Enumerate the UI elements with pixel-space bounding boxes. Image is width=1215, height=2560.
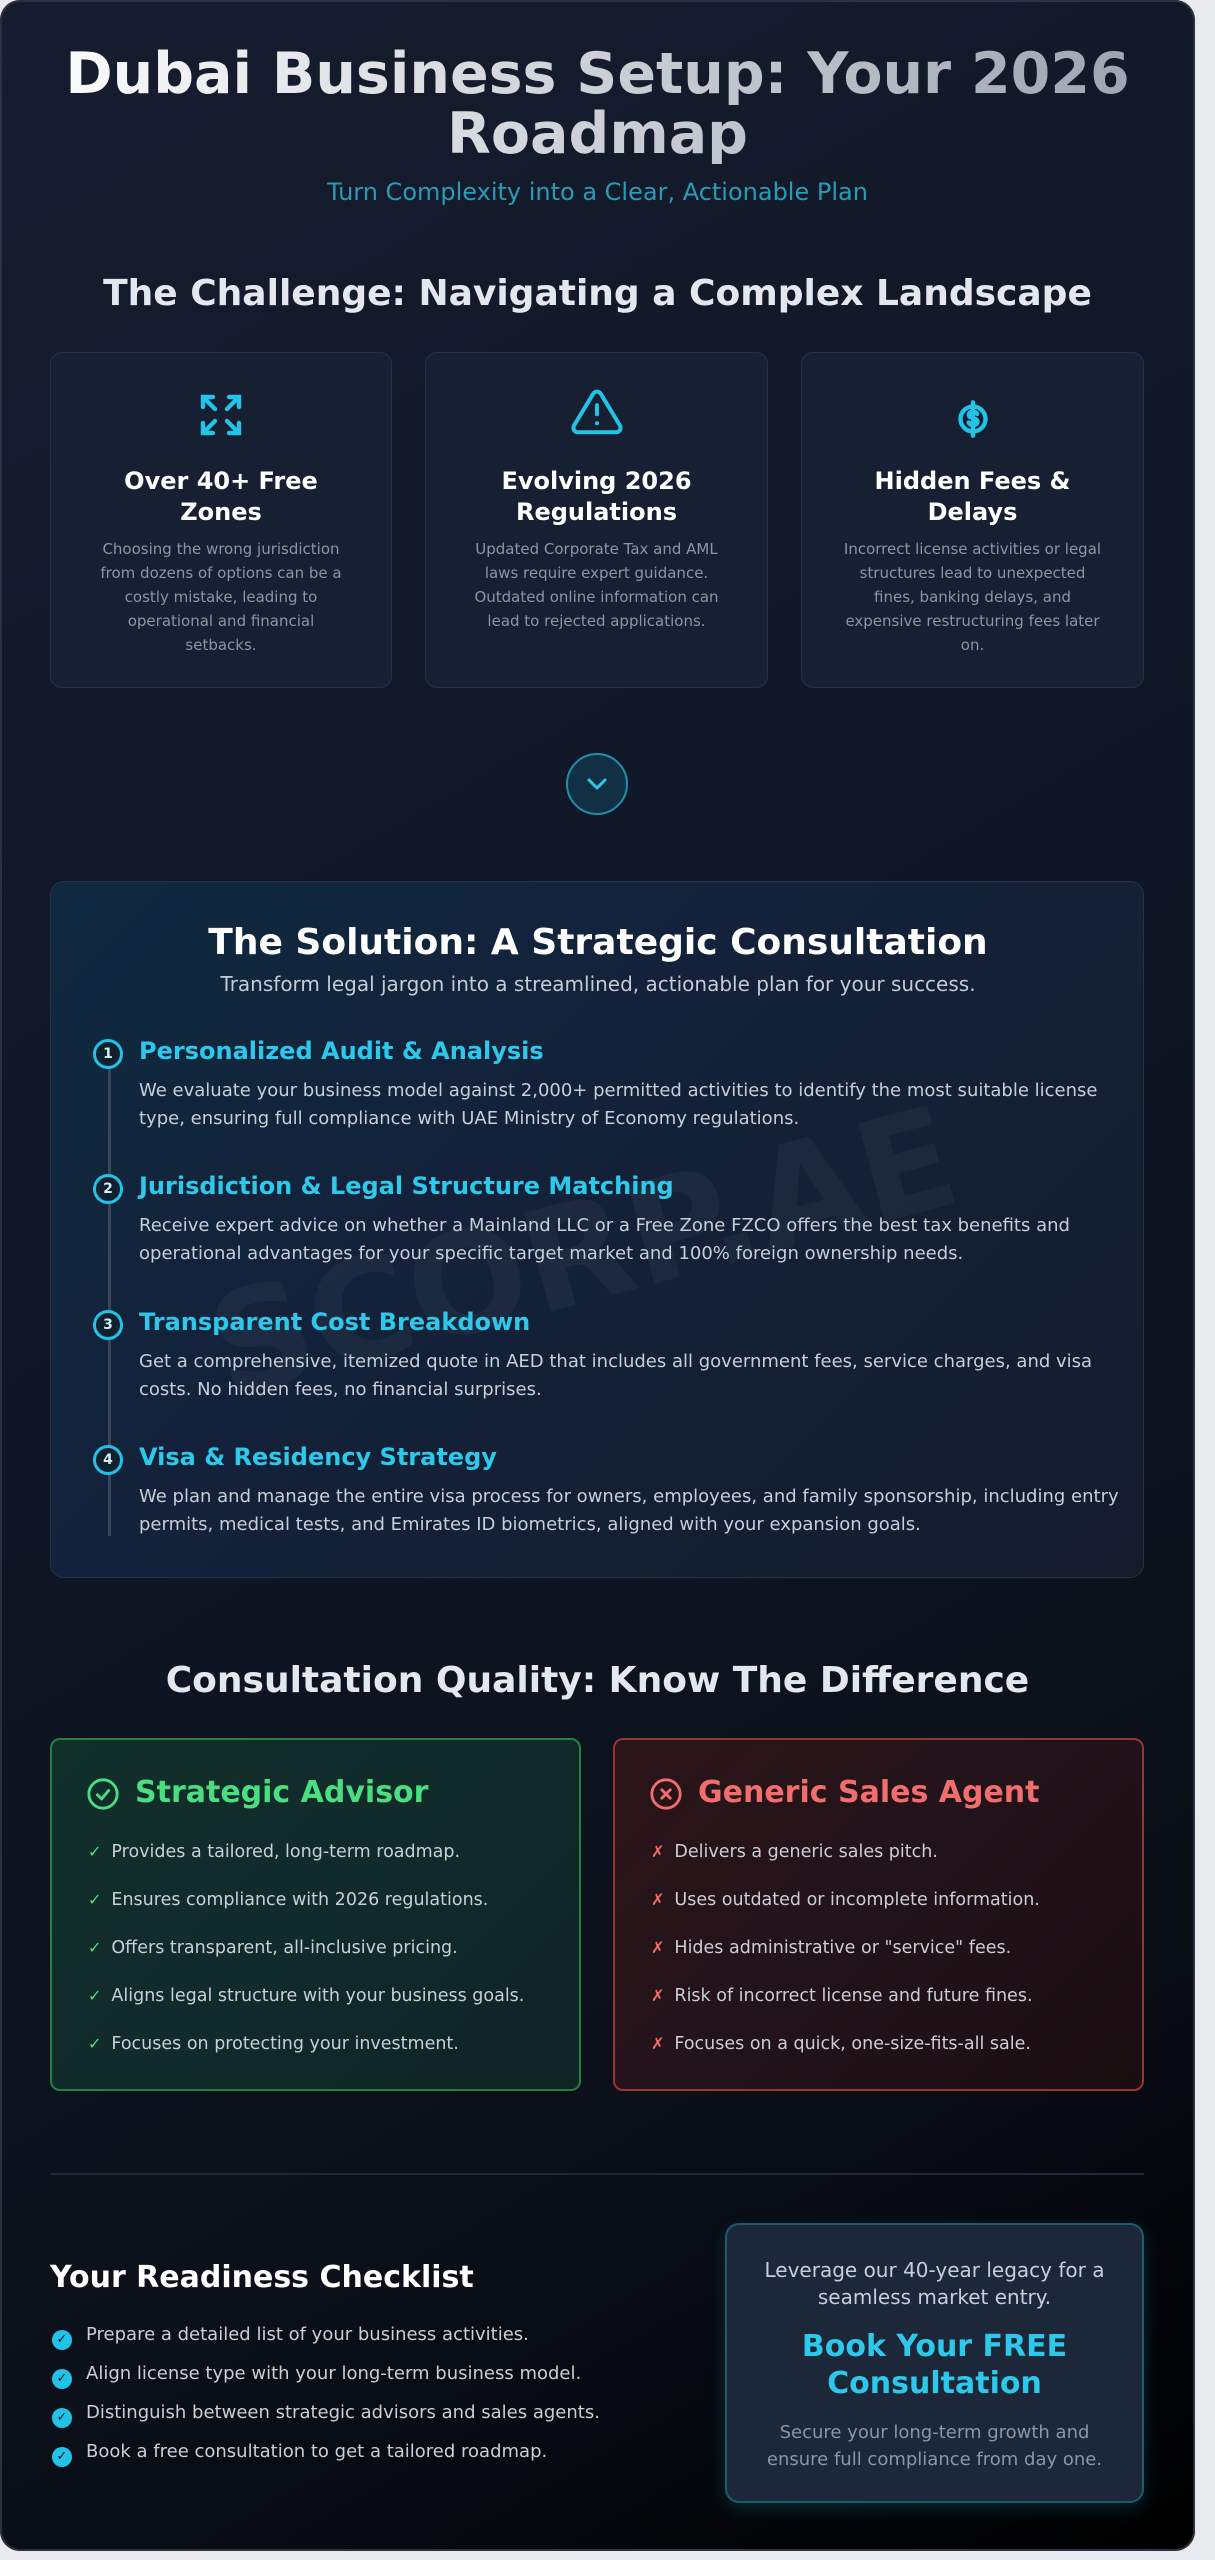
panel: strategic advisor [50, 1738, 581, 2091]
checklist items: Prepare a detailed list of your business activities. [86, 2324, 529, 2345]
panel: generic sales agent [613, 1738, 1144, 2091]
panel: strategic advisor: ✓ Offers transparent, all-inclusive pricing. [88, 1938, 458, 1958]
arrow: chevron down [566, 753, 628, 815]
checklist items: ✓ [57, 2332, 67, 2347]
panel: hidden fees [801, 352, 1144, 688]
panel: strategic advisor: ✓ Provides a tailored, long-term roadmap. [88, 1842, 460, 1862]
panel: strategic advisor: ✓ Aligns legal structure with your business goals. [88, 1986, 524, 2006]
icon: x circle [650, 1778, 682, 1810]
heading: checklist: Your Readiness Checklist [50, 2260, 474, 2295]
panel: free zones [50, 352, 392, 688]
title [0, 44, 1195, 164]
CTA box: Secure your long-term growth and [780, 2422, 1089, 2443]
panel: regulations: Evolving 2026 [501, 467, 692, 495]
step 2 [93, 1172, 1070, 1264]
panel: generic sales agent: ✗ Hides administrative or "service" fees. [651, 1938, 1011, 1958]
panel: free zones: Choosing the wrong jurisdiction from dozens of options can be a costly mistake, leading to operational and financial setbacks. [100, 540, 342, 654]
panel: solution: 1 [103, 1046, 113, 1062]
icon: warning [571, 390, 623, 434]
panel: hidden fees: Delays [928, 498, 1017, 526]
panel: hidden fees: Hidden Fees & [875, 467, 1070, 495]
panel: regulations [425, 352, 768, 688]
CTA box: ensure full compliance from day one. [767, 2449, 1102, 2470]
panel: hidden fees: Incorrect license activities or legal structures lead to unexpected fines, banking delays, and expensive restructuring fees later on. [844, 540, 1101, 654]
step 3 [93, 1308, 1092, 1400]
checklist items [52, 2324, 600, 2467]
panel: free zones: Zones [180, 498, 262, 526]
panel: solution: 3 [103, 1317, 113, 1333]
checklist items: ✓ [57, 2371, 67, 2386]
watermark: SCORP.AE [193, 1076, 974, 1431]
checklist items: ✓ [57, 2449, 67, 2464]
heading: quality: Consultation Quality: Know The Difference [166, 1660, 1029, 1701]
panel: solution: Get a comprehensive, itemized quote in AED that includes all government fees, service charges, and visa costs. No hidden fees, no financial surprises. [139, 1351, 1092, 1400]
title: Roadmap [447, 101, 748, 167]
subtitle: Turn Complexity into a Clear, Actionable Plan [327, 178, 868, 206]
CTA box: Consultation [827, 2366, 1042, 2401]
checklist items: Align license type with your long-term business model. [86, 2363, 581, 2384]
panel: generic sales agent: ✗ Focuses on a quick, one-size-fits-all sale. [651, 2034, 1031, 2054]
panel: regulations: Updated Corporate Tax and AML laws require expert guidance. Outdated online information can lead to rejected applications. [474, 540, 719, 630]
panel: solution: Visa & Residency Strategy [139, 1443, 497, 1471]
panel: solution: We plan and manage the entire visa process for owners, employees, and family sponsorship, including entry permits, medical tests, and Emirates ID biometrics, aligned with your expansion goals. [139, 1486, 1119, 1535]
CTA box [725, 2223, 1144, 2503]
panel: regulations: Regulations [516, 498, 677, 526]
panel: generic sales agent: ✗ Uses outdated or incomplete information. [651, 1890, 1040, 1910]
panel: solution: 4 [103, 1452, 113, 1468]
CTA box: Book Your FREE [802, 2329, 1067, 2364]
panel: solution: Jurisdiction & Legal Structure Matching [139, 1172, 674, 1200]
icon: expand arrows [200, 394, 242, 436]
panel: solution: We evaluate your business model against 2,000+ permitted activities to identify the most suitable license type, ensuring full compliance with UAE Ministry of Economy regulations. [139, 1080, 1098, 1129]
heading: challenge: The Challenge: Navigating a Complex Landscape [103, 273, 1092, 314]
panel: strategic advisor: ✓ Focuses on protecting your investment. [88, 2034, 459, 2054]
title: Dubai Business Setup: Your 2026 [65, 41, 1130, 107]
panel: generic sales agent: Generic Sales Agent [698, 1775, 1040, 1810]
panel: generic sales agent: ✗ Delivers a generic sales pitch. [651, 1842, 938, 1862]
heading: solution: The Solution: A Strategic Consultation [208, 922, 988, 963]
panel: strategic advisor: ✓ Ensures compliance with 2026 regulations. [88, 1890, 488, 1910]
step 1 [93, 1037, 1098, 1129]
panel: free zones: Over 40+ Free [124, 467, 318, 495]
panel: solution: Transparent Cost Breakdown [139, 1308, 530, 1336]
checklist items: Distinguish between strategic advisors and sales agents. [86, 2402, 600, 2423]
panel: solution: 2 [103, 1181, 113, 1197]
panel: solution: Personalized Audit & Analysis [139, 1037, 544, 1065]
panel: solution [50, 881, 1144, 1578]
panel: solution: Receive expert advice on whether a Mainland LLC or a Free Zone FZCO offers the best tax benefits and operational advantages for your specific target market and 100% foreign ownership needs. [139, 1215, 1070, 1264]
CTA box: Leverage our 40-year legacy for a [764, 2258, 1104, 2282]
checklist items: Book a free consultation to get a tailored roadmap. [86, 2441, 547, 2462]
solution subtitle: Transform legal jargon into a streamlined, actionable plan for your success. [220, 972, 976, 996]
CTA box: seamless market entry. [818, 2285, 1051, 2309]
checklist items: ✓ [57, 2410, 67, 2425]
panel: generic sales agent: ✗ Risk of incorrect license and future fines. [651, 1986, 1033, 2006]
icon: dollar [958, 400, 988, 438]
icon: check circle [87, 1778, 119, 1810]
panel: strategic advisor: Strategic Advisor [135, 1775, 428, 1810]
step 4 [93, 1443, 1119, 1535]
